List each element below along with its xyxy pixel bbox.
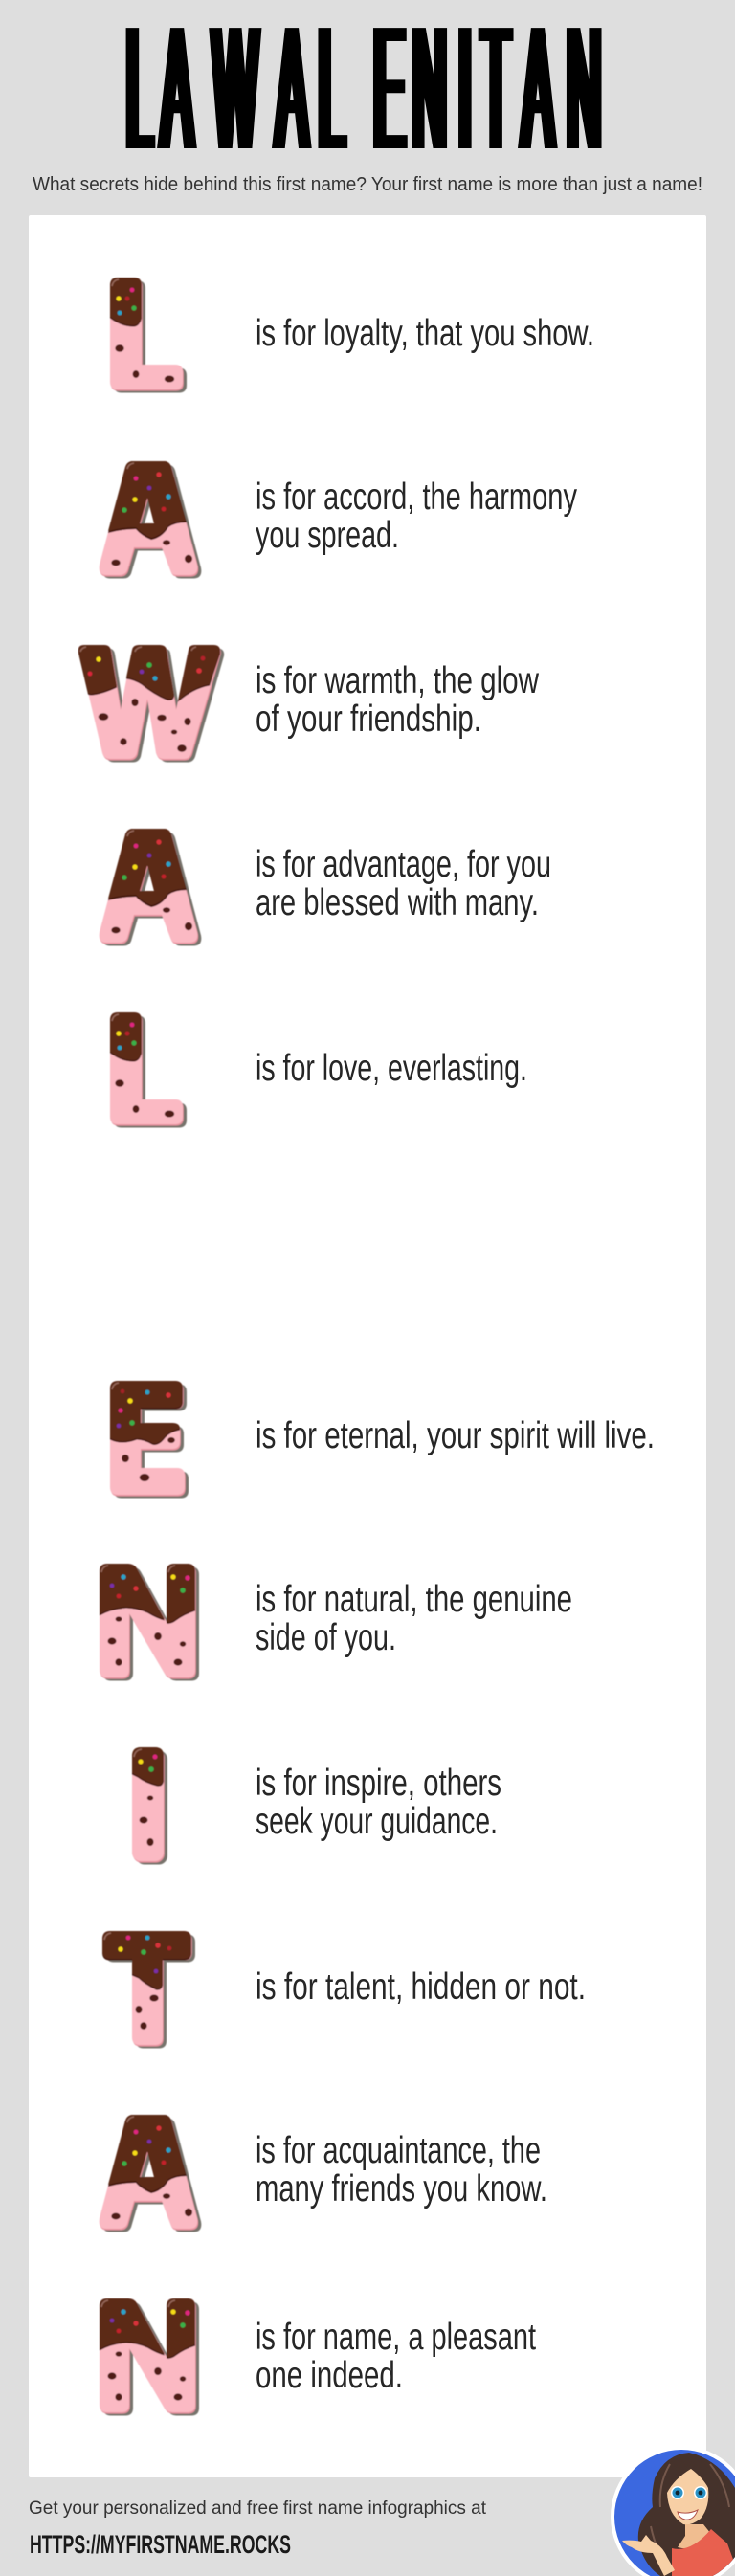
text: acquaintance: many friends you know.	[256, 2168, 547, 2210]
text: acquaintance	[256, 2130, 547, 2210]
text: name: one indeed.	[256, 2355, 403, 2396]
text: inspire: is for inspire, others	[256, 1763, 501, 1804]
row: E eternal	[110, 1381, 655, 1499]
text: inspire: seek your guidance.	[256, 1801, 498, 1842]
row: T talent	[102, 1931, 586, 2048]
icon: letter A	[100, 2115, 201, 2232]
text: accord: you spread.	[256, 515, 399, 556]
icon: letter L	[110, 1012, 187, 1127]
text: love: is for love, everlasting.	[256, 1048, 527, 1089]
row: N natural	[100, 1564, 572, 1680]
avatar	[611, 2446, 735, 2576]
row: A accord	[100, 461, 577, 578]
icon: letter I	[132, 1747, 167, 1864]
icon: letter A	[100, 829, 201, 945]
text: advantage	[256, 844, 551, 923]
text: accord	[256, 477, 577, 556]
text: acquaintance: is for acquaintance, the	[256, 2130, 541, 2171]
icon: letter T	[102, 1931, 195, 2048]
icon: letter L	[110, 278, 187, 392]
icon: letter E	[110, 1381, 189, 1499]
row: I inspire	[132, 1747, 501, 1864]
text: warmth: of your friendship.	[256, 699, 481, 740]
text: natural	[256, 1579, 572, 1658]
footer url: HTTPS://MYFIRSTNAME.ROCKS	[30, 2530, 291, 2559]
text: inspire	[256, 1763, 501, 1842]
row: A acquaintance	[100, 2115, 547, 2232]
text: natural: side of you.	[256, 1617, 396, 1658]
row: A advantage	[100, 829, 551, 945]
text: accord: is for accord, the harmony	[256, 477, 577, 518]
row: L loyalty	[110, 278, 594, 392]
text: name: is for name, a pleasant	[256, 2317, 536, 2358]
text: warmth	[256, 660, 540, 740]
text: warmth: is for warmth, the glow	[256, 660, 540, 701]
text: name	[256, 2317, 536, 2396]
text: advantage: are blessed with many.	[256, 882, 539, 923]
icon: letter N	[100, 2298, 199, 2415]
text: advantage: is for advantage, for you	[256, 844, 551, 885]
text: natural: is for natural, the genuine	[256, 1579, 572, 1620]
row: W warmth	[78, 645, 540, 762]
row: L love	[110, 1012, 527, 1127]
icon: letter A	[100, 461, 201, 578]
text: loyalty: is for loyalty, that you show.	[256, 313, 594, 354]
icon: letter W	[78, 645, 224, 762]
text: talent: is for talent, hidden or not.	[256, 1966, 586, 2008]
footer text: Get your personalized and free first name infographics at	[29, 2498, 487, 2519]
icon: letter N	[100, 1564, 199, 1680]
row: N name	[100, 2298, 536, 2415]
subtitle: What secrets hide behind this first name? Your first name is more than just a name!	[33, 174, 702, 195]
